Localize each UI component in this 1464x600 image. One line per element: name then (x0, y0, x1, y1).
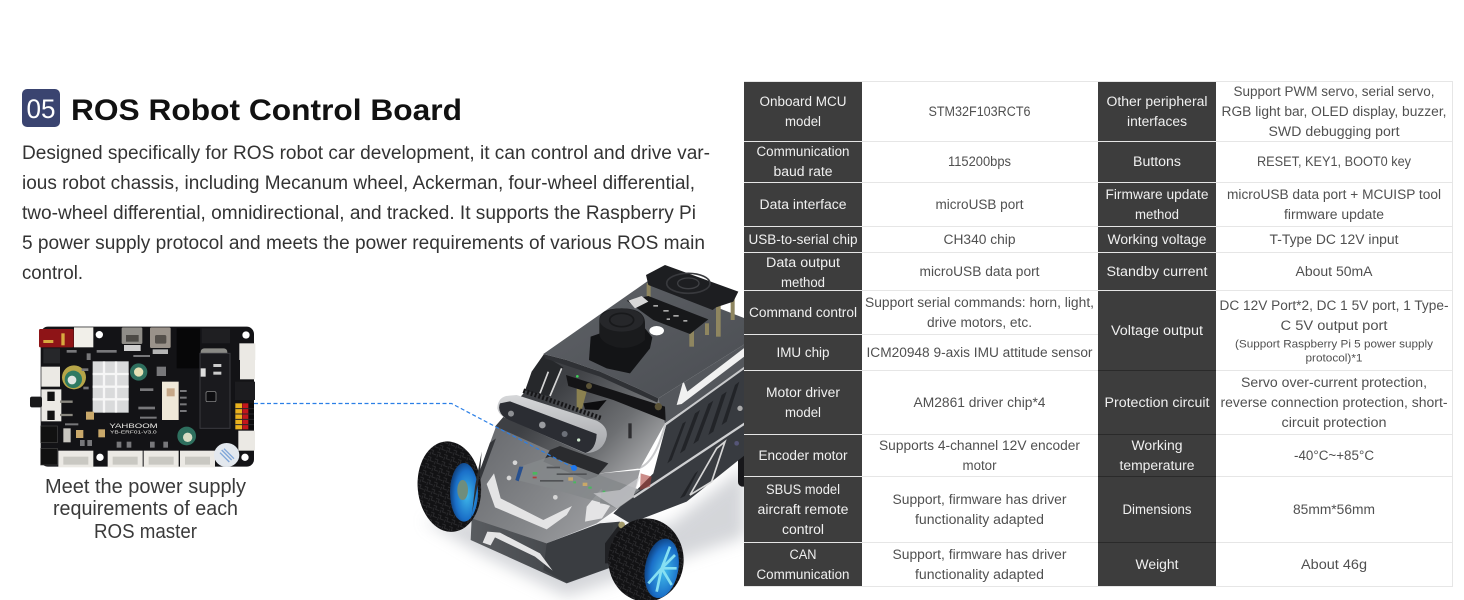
right column labels: Buttons (1133, 154, 1181, 169)
left column values: functionality adapted (915, 512, 1044, 527)
right column values: About 50mA (1296, 264, 1372, 279)
section number badge (22, 89, 60, 127)
right column labels: Working (1132, 438, 1182, 453)
right column labels: Voltage output (1111, 323, 1203, 338)
front left wheel (414, 439, 485, 535)
capacitors (62, 363, 196, 445)
left column labels: method (781, 275, 825, 290)
front hood (472, 427, 640, 543)
left column labels: Encoder motor (758, 448, 848, 463)
left column values: motor (962, 458, 997, 473)
heatsink (93, 361, 129, 413)
description paragraph: Designed specifically for ROS robot car development, it can control and drive var- (22, 143, 710, 164)
right column values: RESET, KEY1, BOOT0 key (1257, 154, 1411, 169)
description paragraph: ious robot chassis, including Mecanum wheel, Ackerman, four-wheel differential, (22, 173, 695, 194)
right column values: (Support Raspberry Pi 5 power supply (1235, 338, 1434, 350)
left column labels: model (785, 405, 821, 420)
USB ports (122, 327, 171, 354)
left column values (865, 104, 1094, 582)
far rear wheel (738, 447, 748, 487)
right column values: protocol)*1 (1306, 352, 1362, 364)
left column labels: Motor driver (766, 385, 841, 400)
connector details (63, 388, 210, 465)
description paragraph: two-wheel differential, omnidirectional, and tracked. It supports the Raspberry Pi (22, 203, 696, 224)
left column labels: aircraft remote (758, 502, 848, 517)
right column labels: Firmware update (1106, 187, 1208, 202)
left column values: 115200bps (948, 154, 1011, 169)
section number badge: 05 (26, 94, 56, 124)
right column labels: method (1135, 207, 1179, 222)
left column values: Support, firmware has driver (892, 547, 1067, 562)
board logo text: YB-ERF01-V3.0 (110, 430, 157, 436)
description paragraph: 5 power supply protocol and meets the power requirements of various ROS main (22, 233, 705, 254)
nose lower (471, 518, 620, 583)
buzzer (214, 443, 239, 467)
right column values: C 5V output port (1280, 318, 1388, 333)
left column labels: Data interface (760, 197, 846, 212)
left column values: ICM20948 9-axis IMU attitude sensor (866, 345, 1093, 360)
right column values: microUSB data port + MCUISP tool (1227, 187, 1441, 202)
left column labels: Onboard MCU (760, 94, 846, 109)
right column labels: Other peripheral (1106, 94, 1208, 109)
right column labels: Standby current (1106, 264, 1208, 279)
right column values: T-Type DC 12V input (1270, 232, 1399, 247)
power switch (30, 392, 73, 420)
left column labels: Communication (756, 144, 850, 159)
board caption: Meet the power supply (45, 476, 246, 498)
left column labels: Command control (749, 305, 857, 320)
pin header (235, 382, 255, 429)
right column labels: Dimensions (1122, 502, 1192, 517)
left column labels: model (785, 114, 821, 129)
right column values: Servo over-current protection, (1241, 375, 1427, 390)
side connectors (41, 343, 255, 467)
board logo text (109, 423, 158, 436)
cabin pillars (525, 355, 632, 438)
board caption: ROS master (94, 521, 197, 543)
screw holes (96, 331, 250, 461)
left column labels (748, 94, 858, 582)
left column values: STM32F103RCT6 (928, 104, 1030, 119)
right column values: circuit protection (1282, 415, 1386, 430)
buttons (41, 412, 105, 465)
left column labels: IMU chip (776, 345, 830, 360)
depth camera (497, 391, 607, 453)
left column values: Supports 4-channel 12V encoder (879, 438, 1081, 453)
right column values: SWD debugging port (1268, 124, 1400, 139)
right column values: reverse connection protection, short- (1220, 395, 1448, 410)
top plate (543, 281, 745, 398)
left column labels: CAN (790, 547, 816, 562)
control board in hood (507, 446, 652, 508)
right column values: -40°C~+85°C (1294, 448, 1374, 463)
left column values: AM2861 driver chip*4 (914, 395, 1046, 410)
control board photo (30, 327, 255, 467)
left column values: Support serial commands: horn, light, (865, 295, 1094, 310)
right column labels: Weight (1136, 557, 1179, 572)
front right wheel (605, 518, 684, 600)
right column labels: interfaces (1127, 114, 1187, 129)
left column values: Support, firmware has driver (892, 492, 1067, 507)
left column labels: control (782, 522, 824, 537)
speaker board (627, 265, 738, 347)
description paragraph: control. (22, 263, 83, 284)
right column labels: temperature (1120, 458, 1194, 473)
board logo text: YAHBOOM (109, 423, 158, 430)
left column values: microUSB data port (920, 264, 1040, 279)
right column labels: Working voltage (1108, 232, 1206, 247)
title: ROS Robot Control Board (71, 94, 462, 127)
right column values (1220, 84, 1448, 572)
power connector (39, 327, 93, 363)
specification table (744, 81, 1452, 586)
left column values: drive motors, etc. (927, 315, 1032, 330)
robot car illustration (414, 265, 748, 600)
right column values: DC 12V Port*2, DC 1 5V port, 1 Type- (1220, 298, 1448, 313)
DC jack and header (177, 328, 230, 428)
right column values: 85mm*56mm (1293, 502, 1375, 517)
left column labels: SBUS model (766, 482, 840, 497)
left column labels: Communication (756, 567, 850, 582)
board caption: requirements of each (53, 498, 238, 520)
right column labels: Protection circuit (1104, 395, 1210, 410)
right column values: RGB light bar, OLED display, buzzer, (1222, 104, 1446, 119)
right column values: firmware update (1284, 207, 1384, 222)
nose decals (483, 473, 611, 571)
cabin interior (495, 355, 665, 473)
side body (613, 344, 745, 523)
front sensor strip (566, 375, 666, 421)
right column labels (1104, 94, 1210, 572)
board caption (45, 476, 246, 543)
left column values: CH340 chip (944, 232, 1016, 247)
small components (65, 350, 187, 448)
description paragraph (22, 143, 710, 284)
left column values: functionality adapted (915, 567, 1044, 582)
right column values: About 46g (1301, 557, 1367, 572)
dashed callout line from board to robot (254, 404, 577, 471)
left column labels: Data output (766, 255, 840, 270)
left column labels: USB-to-serial chip (748, 232, 858, 247)
left column values: microUSB port (936, 197, 1024, 212)
left column labels: baud rate (774, 164, 832, 179)
lidar (589, 308, 652, 373)
right column values: Support PWM servo, serial servo, (1234, 84, 1434, 99)
